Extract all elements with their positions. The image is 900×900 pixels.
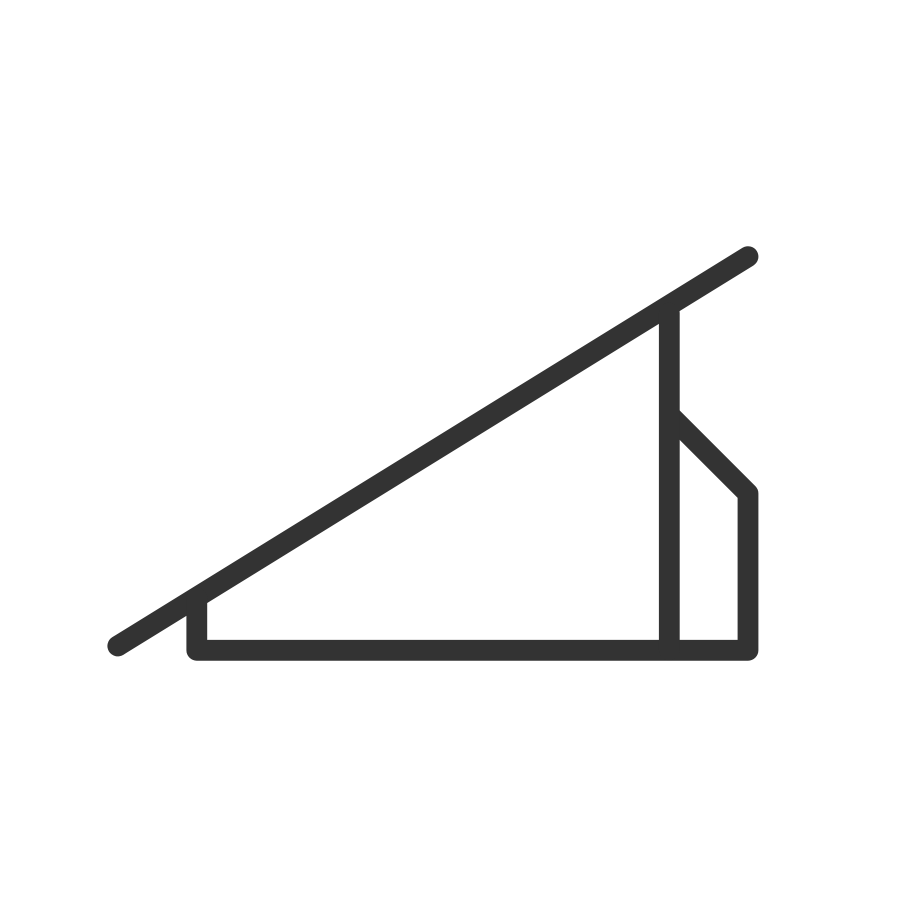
vertical divider wall [659, 313, 680, 650]
building outline [197, 415, 748, 650]
roof line [118, 257, 748, 646]
